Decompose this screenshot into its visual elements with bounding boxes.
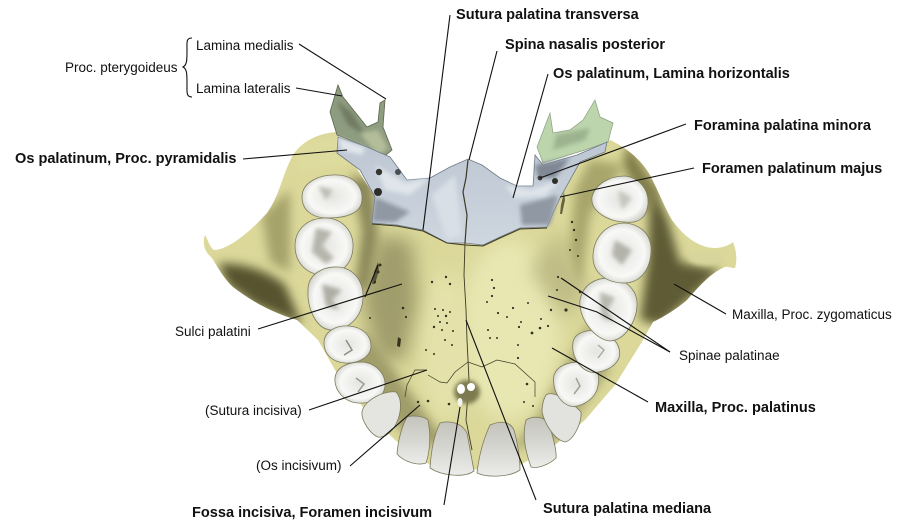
tooth: left second molar bbox=[295, 218, 353, 275]
label: proc. pterygoideus: Proc. pterygoideus bbox=[65, 60, 178, 75]
label: os palatinum lamina horizontalis: Os palatinum, Lamina horizontalis bbox=[553, 66, 790, 82]
label: maxilla proc. palatinus: Maxilla, Proc. palatinus bbox=[655, 400, 816, 416]
label: fossa incisiva, foramen incisivum: Fossa incisiva, Foramen incisivum bbox=[192, 505, 432, 521]
tooth: left second premolar bbox=[324, 326, 371, 363]
teeth bbox=[295, 175, 651, 476]
label: maxilla proc. zygomaticus: Maxilla, Proc. zygomaticus bbox=[732, 307, 892, 322]
tooth: right second premolar bbox=[573, 330, 620, 372]
illustration: maxilla and palatine bones bbox=[204, 85, 736, 476]
foramina and palatine pits bbox=[369, 180, 581, 407]
tooth: left first premolar bbox=[335, 362, 385, 403]
fossa incisiva bbox=[454, 380, 480, 406]
brace: proc. pterygoideus bbox=[183, 38, 192, 97]
label: sulci palatini: Sulci palatini bbox=[175, 324, 251, 339]
label: spina nasalis posterior: Spina nasalis posterior bbox=[505, 37, 665, 53]
os palatinum, lamina horizontalis bbox=[337, 137, 607, 245]
label: sutura incisiva: (Sutura incisiva) bbox=[205, 403, 302, 418]
tooth: left first molar bbox=[308, 267, 363, 330]
label: os palatinum proc. pyramidalis: Os palatinum, Proc. pyramidalis bbox=[15, 151, 237, 167]
label: lamina lateralis: Lamina lateralis bbox=[196, 81, 291, 96]
label: sutura palatina transversa: Sutura palatina transversa bbox=[456, 7, 640, 23]
lamina lateralis, left pterygoid process bbox=[330, 85, 392, 160]
tooth: right first premolar bbox=[554, 362, 599, 406]
label: sutura palatina mediana: Sutura palatina mediana bbox=[543, 501, 712, 517]
maxilla bone bbox=[204, 132, 736, 470]
label: os incisivum: (Os incisivum) bbox=[256, 458, 342, 473]
lamina, right pterygoid process bbox=[537, 100, 613, 163]
tooth: right canine bbox=[542, 394, 581, 442]
tooth: left third molar bbox=[302, 175, 362, 218]
label: foramen palatinum majus: Foramen palatinum majus bbox=[702, 161, 882, 177]
tooth: left central incisor bbox=[430, 422, 474, 475]
tooth: right third molar bbox=[592, 176, 648, 222]
sutures bbox=[372, 160, 547, 450]
label: spinae palatinae: Spinae palatinae bbox=[679, 348, 780, 363]
tooth: left lateral incisor bbox=[397, 416, 430, 464]
label: foramina palatina minora: Foramina palatina minora bbox=[694, 118, 872, 134]
tooth: right second molar bbox=[593, 223, 651, 283]
tooth: right first molar bbox=[580, 278, 637, 341]
tooth: left canine bbox=[362, 392, 400, 437]
tooth: right central incisor bbox=[477, 422, 520, 476]
leader lines bbox=[243, 15, 726, 505]
tooth: right lateral incisor bbox=[524, 417, 556, 467]
label: lamina medialis: Lamina medialis bbox=[196, 38, 294, 53]
